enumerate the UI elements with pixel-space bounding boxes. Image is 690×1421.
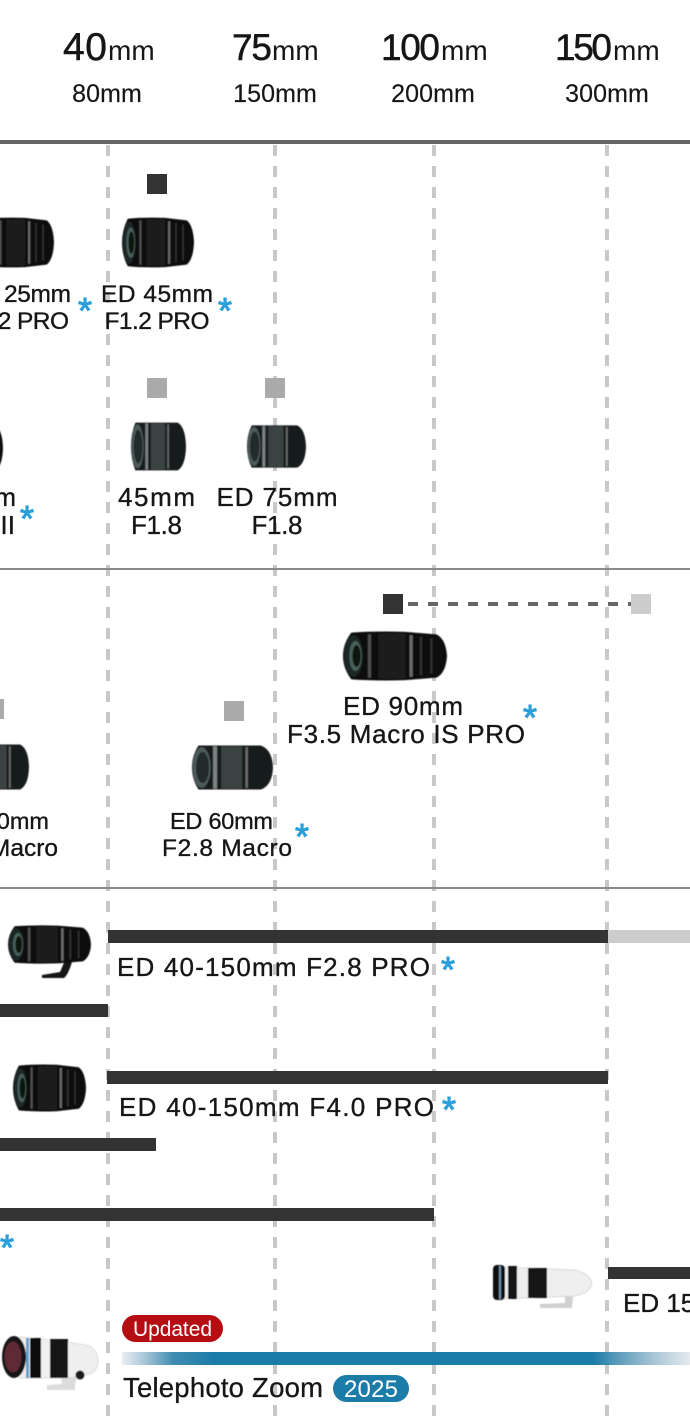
column 40mm: 80mm xyxy=(72,80,142,108)
lens: ED 30mm xyxy=(0,744,29,790)
header: focal length scale xyxy=(63,26,660,108)
label: ED 40-150mm F2.8 PRO: ED 40-150mm F2.8 PRO xyxy=(117,952,430,982)
column 100mm: mm xyxy=(441,35,488,66)
range bar: ED 40-150mm F4.0 PRO xyxy=(107,1071,608,1084)
badge: 2025: 2025 xyxy=(344,1376,398,1403)
label: 45mm F1.8: F1.8 xyxy=(131,510,182,540)
badge: 2025 xyxy=(333,1375,409,1403)
column 100mm xyxy=(381,27,488,108)
label: ED 90mm F3.5 Macro IS PRO: F3.5 Macro IS PRO xyxy=(287,719,525,749)
label: ED 45mm F1.2 PRO xyxy=(101,281,213,335)
label: cropped prime: II xyxy=(1,510,15,540)
column 150mm: mm xyxy=(613,35,660,66)
column 100mm: 100 xyxy=(381,27,440,68)
column 75mm xyxy=(232,27,319,108)
asterisk: * xyxy=(441,949,455,990)
asterisk: * xyxy=(295,816,309,857)
label: 45mm F1.8 xyxy=(118,482,195,540)
lens: ED 150-400mm xyxy=(493,1265,592,1308)
marker: ED 75mm xyxy=(265,378,285,398)
lens: 45mm F1.8 xyxy=(131,423,186,470)
label: ED 45mm F1.2 PRO: ED 45mm xyxy=(101,281,213,308)
marker: ED 60mm xyxy=(224,701,244,721)
label: cropped prime xyxy=(0,482,16,540)
horizontal section dividers xyxy=(0,140,690,889)
column 40mm: 40 xyxy=(63,26,107,69)
lens: ED 40-150mm F2.8 PRO xyxy=(8,925,91,978)
label: ED 25mm F1.2 PRO xyxy=(0,281,71,335)
lens: ED 45mm xyxy=(122,218,194,267)
badge: Updated xyxy=(122,1315,223,1342)
asterisk: * xyxy=(523,697,537,738)
asterisk: * xyxy=(0,1227,14,1268)
marker: 45mm xyxy=(147,378,167,398)
label: 45mm F1.8: 45mm xyxy=(118,482,195,512)
column 150mm: 150 xyxy=(555,27,612,68)
label: Telephoto Zoom: Telephoto Zoom xyxy=(123,1372,323,1403)
panel: fixed focal length lenses xyxy=(0,174,338,540)
column 75mm: 150mm xyxy=(233,80,317,108)
label: ED 25mm F1.2 PRO: 25mm xyxy=(4,281,71,308)
column 75mm: mm xyxy=(272,35,319,66)
asterisk: * xyxy=(20,498,34,539)
panel: zoom lenses xyxy=(0,925,690,1403)
lens: ED 25mm xyxy=(0,218,54,267)
marker: ED 45mm xyxy=(147,174,167,194)
lens: 50-250mm telephoto zoom xyxy=(2,1336,98,1390)
lens: cropped wide prime xyxy=(0,426,3,470)
label: ED 75mm F1.8 xyxy=(216,482,338,540)
label: ED 60mm F2.8 Macro xyxy=(162,808,292,862)
range bar: cropped zoom xyxy=(0,1004,108,1017)
column 100mm: 200mm xyxy=(391,80,475,108)
column 40mm xyxy=(63,26,155,108)
column 75mm: 75 xyxy=(232,27,272,68)
marker: cropped macro xyxy=(0,699,4,719)
label: ED 40-150mm F4.0 PRO: ED 40-150mm F4.0 PRO xyxy=(119,1092,434,1122)
range bar: cropped zoom 2 xyxy=(0,1138,156,1151)
column 40mm: mm xyxy=(108,35,155,66)
asterisk: * xyxy=(78,290,92,331)
panel: macro lenses xyxy=(0,594,651,862)
label: ED 90mm F3.5 Macro IS PRO xyxy=(287,691,525,749)
label: ED 30mm Macro xyxy=(0,808,58,862)
range bar: cropped zoom 3 xyxy=(0,1208,434,1221)
label: ED 60mm F2.8 Macro: F2.8 Macro xyxy=(162,835,292,862)
range marker: ED 90mm xyxy=(383,594,651,614)
badge: Updated: Updated xyxy=(133,1318,212,1341)
vertical focal length guide lines xyxy=(108,145,607,1421)
range bar: ED 150-400mm xyxy=(608,1267,690,1279)
label: ED 60mm F2.8 Macro: ED 60mm xyxy=(170,808,273,834)
label: ED 45mm F1.2 PRO: F1.2 PRO xyxy=(104,308,210,335)
label: ED 75mm F1.8: F1.8 xyxy=(252,510,302,540)
range bar: ED 40-150mm F2.8 PRO xyxy=(108,930,690,943)
asterisk: * xyxy=(218,290,232,331)
lens: ED 60mm xyxy=(192,745,273,790)
range bar: Telephoto Zoom xyxy=(122,1352,690,1365)
asterisk: * xyxy=(442,1089,456,1130)
column 150mm: 300mm xyxy=(565,80,649,108)
column 150mm xyxy=(555,27,660,108)
label: ED 90mm F3.5 Macro IS PRO: ED 90mm xyxy=(343,691,463,721)
lens: ED 40-150mm F4.0 PRO xyxy=(13,1065,86,1111)
lens: ED 75mm F1.8 xyxy=(247,425,306,468)
lens: ED 90mm xyxy=(343,632,447,680)
label: ED 75mm F1.8: ED 75mm xyxy=(216,482,338,512)
